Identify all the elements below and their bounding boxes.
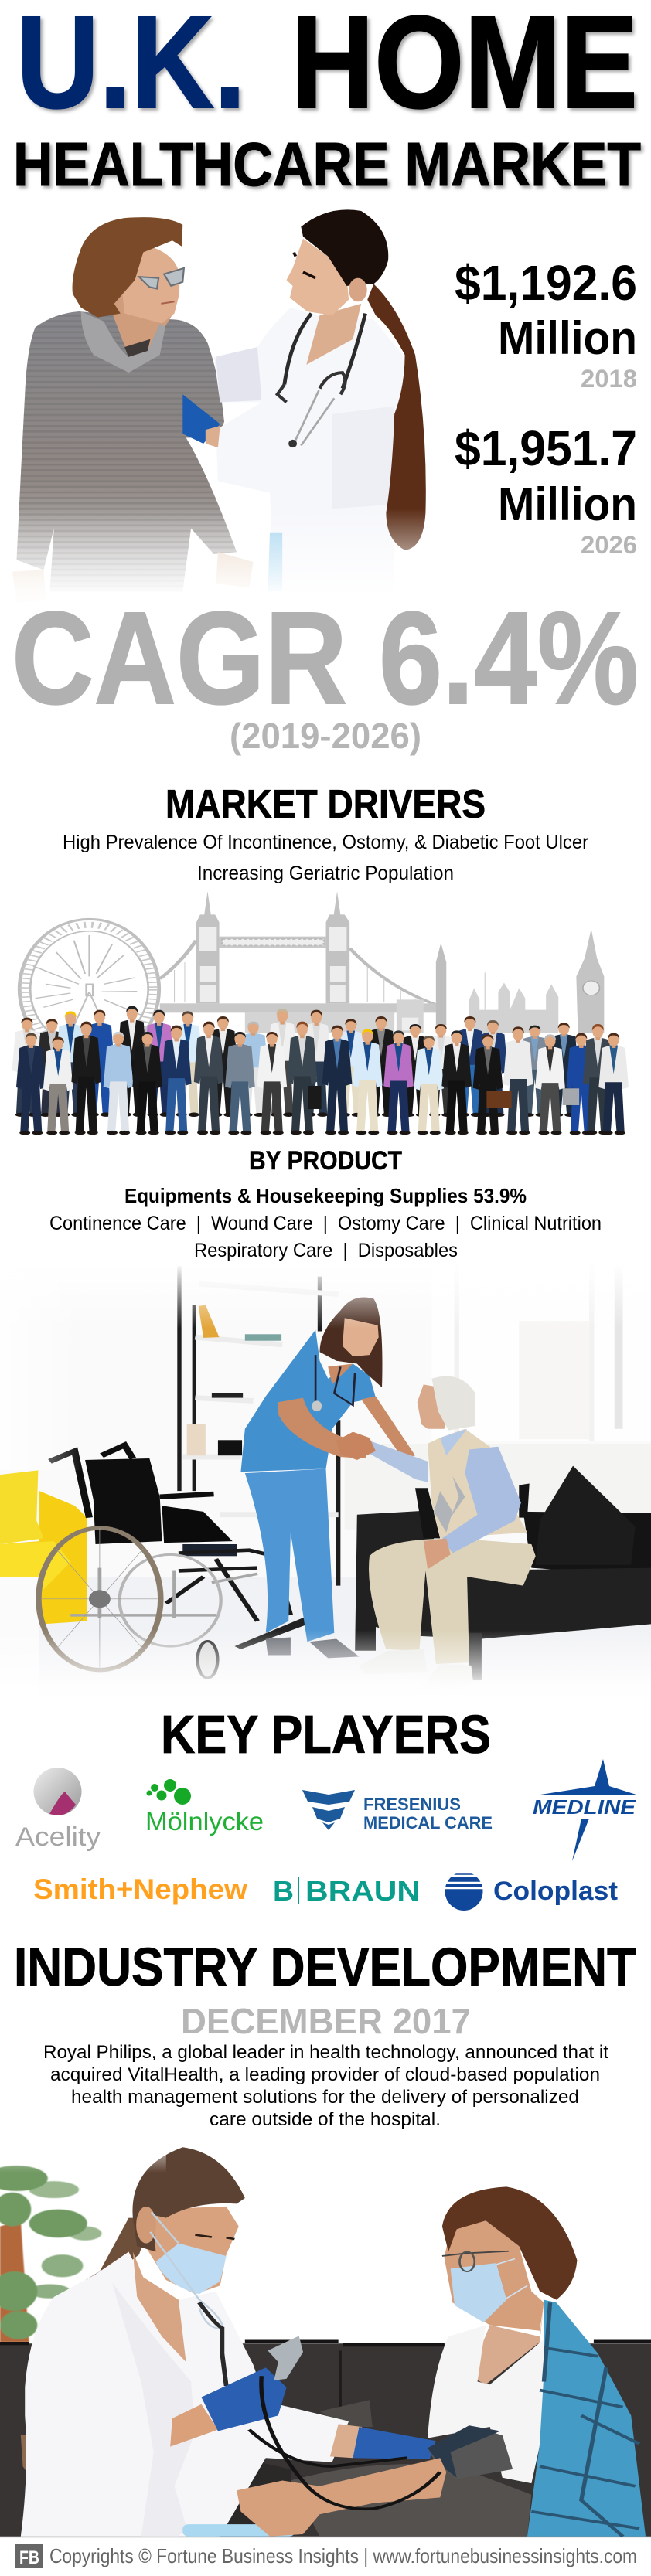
footer — [0, 2537, 651, 2568]
nurse — [240, 1297, 415, 1658]
stat: 2026 value: 2026 — [581, 531, 637, 559]
logo: Acelity — [15, 1768, 101, 1852]
tower bridge — [160, 891, 438, 1012]
ferris wheel — [19, 919, 159, 1060]
development paragraph — [43, 2042, 608, 2130]
photo edge fades — [0, 1263, 651, 1700]
patient — [237, 2186, 646, 2537]
logo: B. Braun: BRAUN — [305, 1875, 420, 1907]
product list line 2: Respiratory Care | Disposables — [194, 1240, 458, 1261]
logo: Smith+Nephew: Smith+Nephew — [33, 1873, 247, 1905]
woman figure — [12, 217, 254, 604]
briefcases — [308, 1086, 579, 1109]
logo: Acelity: Acelity — [15, 1822, 101, 1852]
stat: 2026 value: $1,951.7 — [455, 420, 637, 476]
logo: Coloplast: Coloplast — [493, 1877, 618, 1906]
product list line 1: Continence Care | Wound Care | Ostomy Care | Clinical Nutrition — [49, 1213, 602, 1234]
buildings — [245, 929, 604, 1033]
development paragraph: Royal Philips, a global leader in health technology, announced that it — [43, 2042, 608, 2063]
shelving — [179, 1266, 339, 1586]
yellow armchair — [0, 1470, 87, 1700]
logo: B. Braun: B — [273, 1875, 294, 1907]
stat: 2018 value — [455, 255, 637, 393]
senior man — [336, 1376, 536, 1698]
logo: Fresenius Medical Care — [302, 1790, 493, 1832]
stat: 2026 value: Million — [498, 478, 637, 530]
logo: Molnlycke — [145, 1779, 264, 1836]
driver 2: Increasing Geriatric Population — [197, 863, 454, 884]
stat: 2018 value: $1,192.6 — [455, 255, 637, 311]
logo: Medline — [533, 1759, 636, 1861]
black sofa — [355, 1466, 651, 1680]
development paragraph: acquired VitalHealth, a leading provider of cloud-based population — [50, 2064, 600, 2085]
room background — [0, 1263, 651, 1700]
logo: Medline: MEDLINE — [533, 1795, 636, 1819]
stat: 2018 value: 2018 — [581, 365, 637, 393]
heading: by product: BY PRODUCT — [249, 1146, 402, 1176]
heading: key players: KEY PLAYERS — [161, 1704, 491, 1764]
top left fade — [0, 2133, 166, 2173]
photo: doctor measuring blood pressure — [0, 2133, 651, 2537]
date: DECEMBER 2017 — [181, 2001, 471, 2041]
logos — [15, 1759, 636, 1911]
CAGR period: (2019-2026) — [230, 716, 421, 756]
front row — [16, 1022, 629, 1135]
photo: nurse greeting senior man with wheelchair — [0, 1263, 651, 1700]
sofa — [0, 2342, 651, 2537]
logo: Fresenius Medical Care: FRESENIUS — [363, 1795, 461, 1814]
photo bottom fade — [0, 509, 457, 611]
logo: Molnlycke: Mölnlycke — [145, 1807, 264, 1836]
logo: B. Braun — [273, 1875, 420, 1907]
doctor — [21, 2147, 436, 2537]
footer logo: FB — [19, 2547, 39, 2568]
leading segment: Equipments & Housekeeping Supplies 53.9% — [124, 1184, 527, 1207]
back row — [12, 1006, 579, 1117]
plant — [0, 2166, 102, 2342]
illustration: crowd of professionals — [12, 1006, 629, 1135]
stat: 2026 value — [455, 420, 637, 559]
driver 1: High Prevalence Of Incontinence, Ostomy, & Diabetic Foot Ulcer — [63, 832, 588, 853]
title: U.K. Home — [16, 0, 638, 136]
stat: 2018 value: Million — [498, 312, 637, 364]
wheelchair — [39, 1445, 312, 1678]
logo: Fresenius Medical Care: MEDICAL CARE — [363, 1813, 493, 1832]
heading: market drivers: MARKET DRIVERS — [165, 782, 486, 827]
logo: Coloplast — [445, 1872, 618, 1911]
illustration: London skyline — [19, 891, 604, 1060]
doctor figure — [206, 209, 426, 591]
photo: doctor supporting elderly woman — [0, 209, 457, 611]
development paragraph: care outside of the hospital. — [210, 2109, 441, 2130]
development paragraph: health management solutions for the delivery of personalized — [71, 2087, 579, 2108]
